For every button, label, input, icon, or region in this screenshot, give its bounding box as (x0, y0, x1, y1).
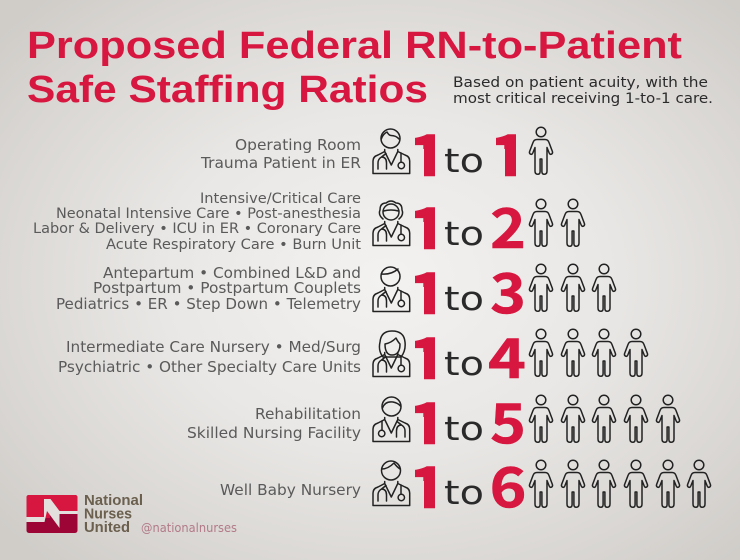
logo: National Nurses United (26, 493, 237, 536)
row 1: 1 to 1 (200, 126, 554, 176)
icon: nurse 6 (373, 461, 410, 506)
ratio: 1 to 5: 1 (410, 379, 446, 459)
unit labels: row 2 (33, 191, 361, 253)
unit labels: row 3 (56, 264, 361, 313)
ratio: 1 to 4: 1 (410, 314, 446, 394)
ratio: 1 to 1 (415, 134, 516, 176)
unit labels: row 2: Neonatal Intensive Care • Post-anesthesia (56, 206, 361, 222)
unit labels: row 5: Rehabilitation (255, 405, 361, 423)
unit labels: row 4: Intermediate Care Nursery • Med/Surg (66, 338, 361, 356)
ratio: 1 to 5: to (444, 409, 484, 448)
ratio: 1 to 6: to (444, 473, 484, 512)
ratio: 1 to 4: to (444, 344, 484, 383)
ratio: 1 to 5 (415, 402, 523, 444)
icon: nurse 2 (373, 201, 410, 246)
title: Safe Staffing Ratios (27, 69, 428, 111)
unit labels: row 5: Skilled Nursing Facility (187, 424, 361, 442)
icon: nurse 4 (373, 331, 410, 376)
ratio: 1 to 5: 5 (490, 379, 526, 459)
ratio: 1 to 6: 1 (410, 443, 446, 523)
social handle: @nationalnurses (141, 520, 237, 535)
ratio: 1 to 3 (415, 272, 523, 314)
logo text (84, 493, 143, 536)
icon: nurse 3 (373, 267, 410, 312)
patients: 4 (529, 329, 648, 376)
ratio: 1 to 2 (415, 207, 524, 250)
unit labels: row 4 (58, 338, 361, 376)
subtitle: most critical receiving 1-to-1 care. (453, 91, 713, 107)
unit labels: row 5 (187, 405, 361, 442)
patients: 6 (529, 460, 711, 507)
icon: logo mark (26, 495, 78, 533)
subtitle (453, 75, 713, 107)
unit labels: row 3: Antepartum • Combined L&D and (103, 264, 361, 282)
row 5: 1 to 5 (188, 394, 680, 444)
ratio: 1 to 3: 1 (410, 249, 446, 329)
row 4: 1 to 4 (60, 328, 648, 380)
ratio: 1 to 1: 1 (410, 111, 446, 191)
unit labels: row 3: Pediatrics • ER • Step Down • Telemetry (56, 295, 361, 313)
icon: nurse 1 (373, 129, 410, 174)
patients: 1 (529, 127, 553, 174)
logo text: National (84, 493, 143, 509)
ratio: 1 to 3: 3 (490, 249, 526, 329)
patients: 3 (529, 264, 616, 311)
ratio: 1 to 6 (415, 466, 524, 508)
unit labels: row 3: Postpartum • Postpartum Couplets (93, 279, 361, 297)
ratio: 1 to 4: 4 (488, 314, 526, 394)
ratio: 1 to 2: to (444, 214, 484, 253)
row 3: 1 to 3 (58, 264, 616, 314)
unit labels: row 1: Operating Room (235, 136, 361, 154)
patients: 5 (529, 395, 680, 442)
ratio: 1 to 1: 1 (490, 111, 528, 191)
ratio: 1 to 6: 6 (490, 443, 526, 523)
ratio: 1 to 3: to (444, 279, 484, 318)
unit labels: row 2: Labor & Delivery • ICU in ER • Coronary Care (33, 221, 361, 237)
unit labels: row 1: Trauma Patient in ER (200, 154, 361, 172)
unit labels: row 4: Psychiatric • Other Specialty Care Units (58, 358, 361, 376)
unit labels: row 2: Acute Respiratory Care • Burn Unit (106, 237, 361, 253)
subtitle: Based on patient acuity, with the (453, 75, 708, 91)
ratio: 1 to 4 (415, 337, 524, 380)
icon: nurse 5 (373, 397, 410, 442)
unit labels: row 1 (200, 136, 361, 172)
title: Proposed Federal RN-to-Patient (27, 25, 682, 67)
logo text: United (84, 520, 130, 536)
unit labels: row 2: Intensive/Critical Care (200, 191, 361, 207)
patients: 2 (529, 199, 585, 246)
ratio: 1 to 2: 2 (490, 184, 526, 264)
row 2: 1 to 2 (34, 192, 586, 252)
row 6: 1 to 6 (220, 460, 712, 508)
ratio: 1 to 1: to (444, 141, 484, 180)
logo text: Nurses (84, 506, 132, 522)
title (27, 25, 682, 111)
ratio: 1 to 2: 1 (410, 184, 446, 264)
unit labels: row 6: Well Baby Nursery (220, 481, 361, 499)
